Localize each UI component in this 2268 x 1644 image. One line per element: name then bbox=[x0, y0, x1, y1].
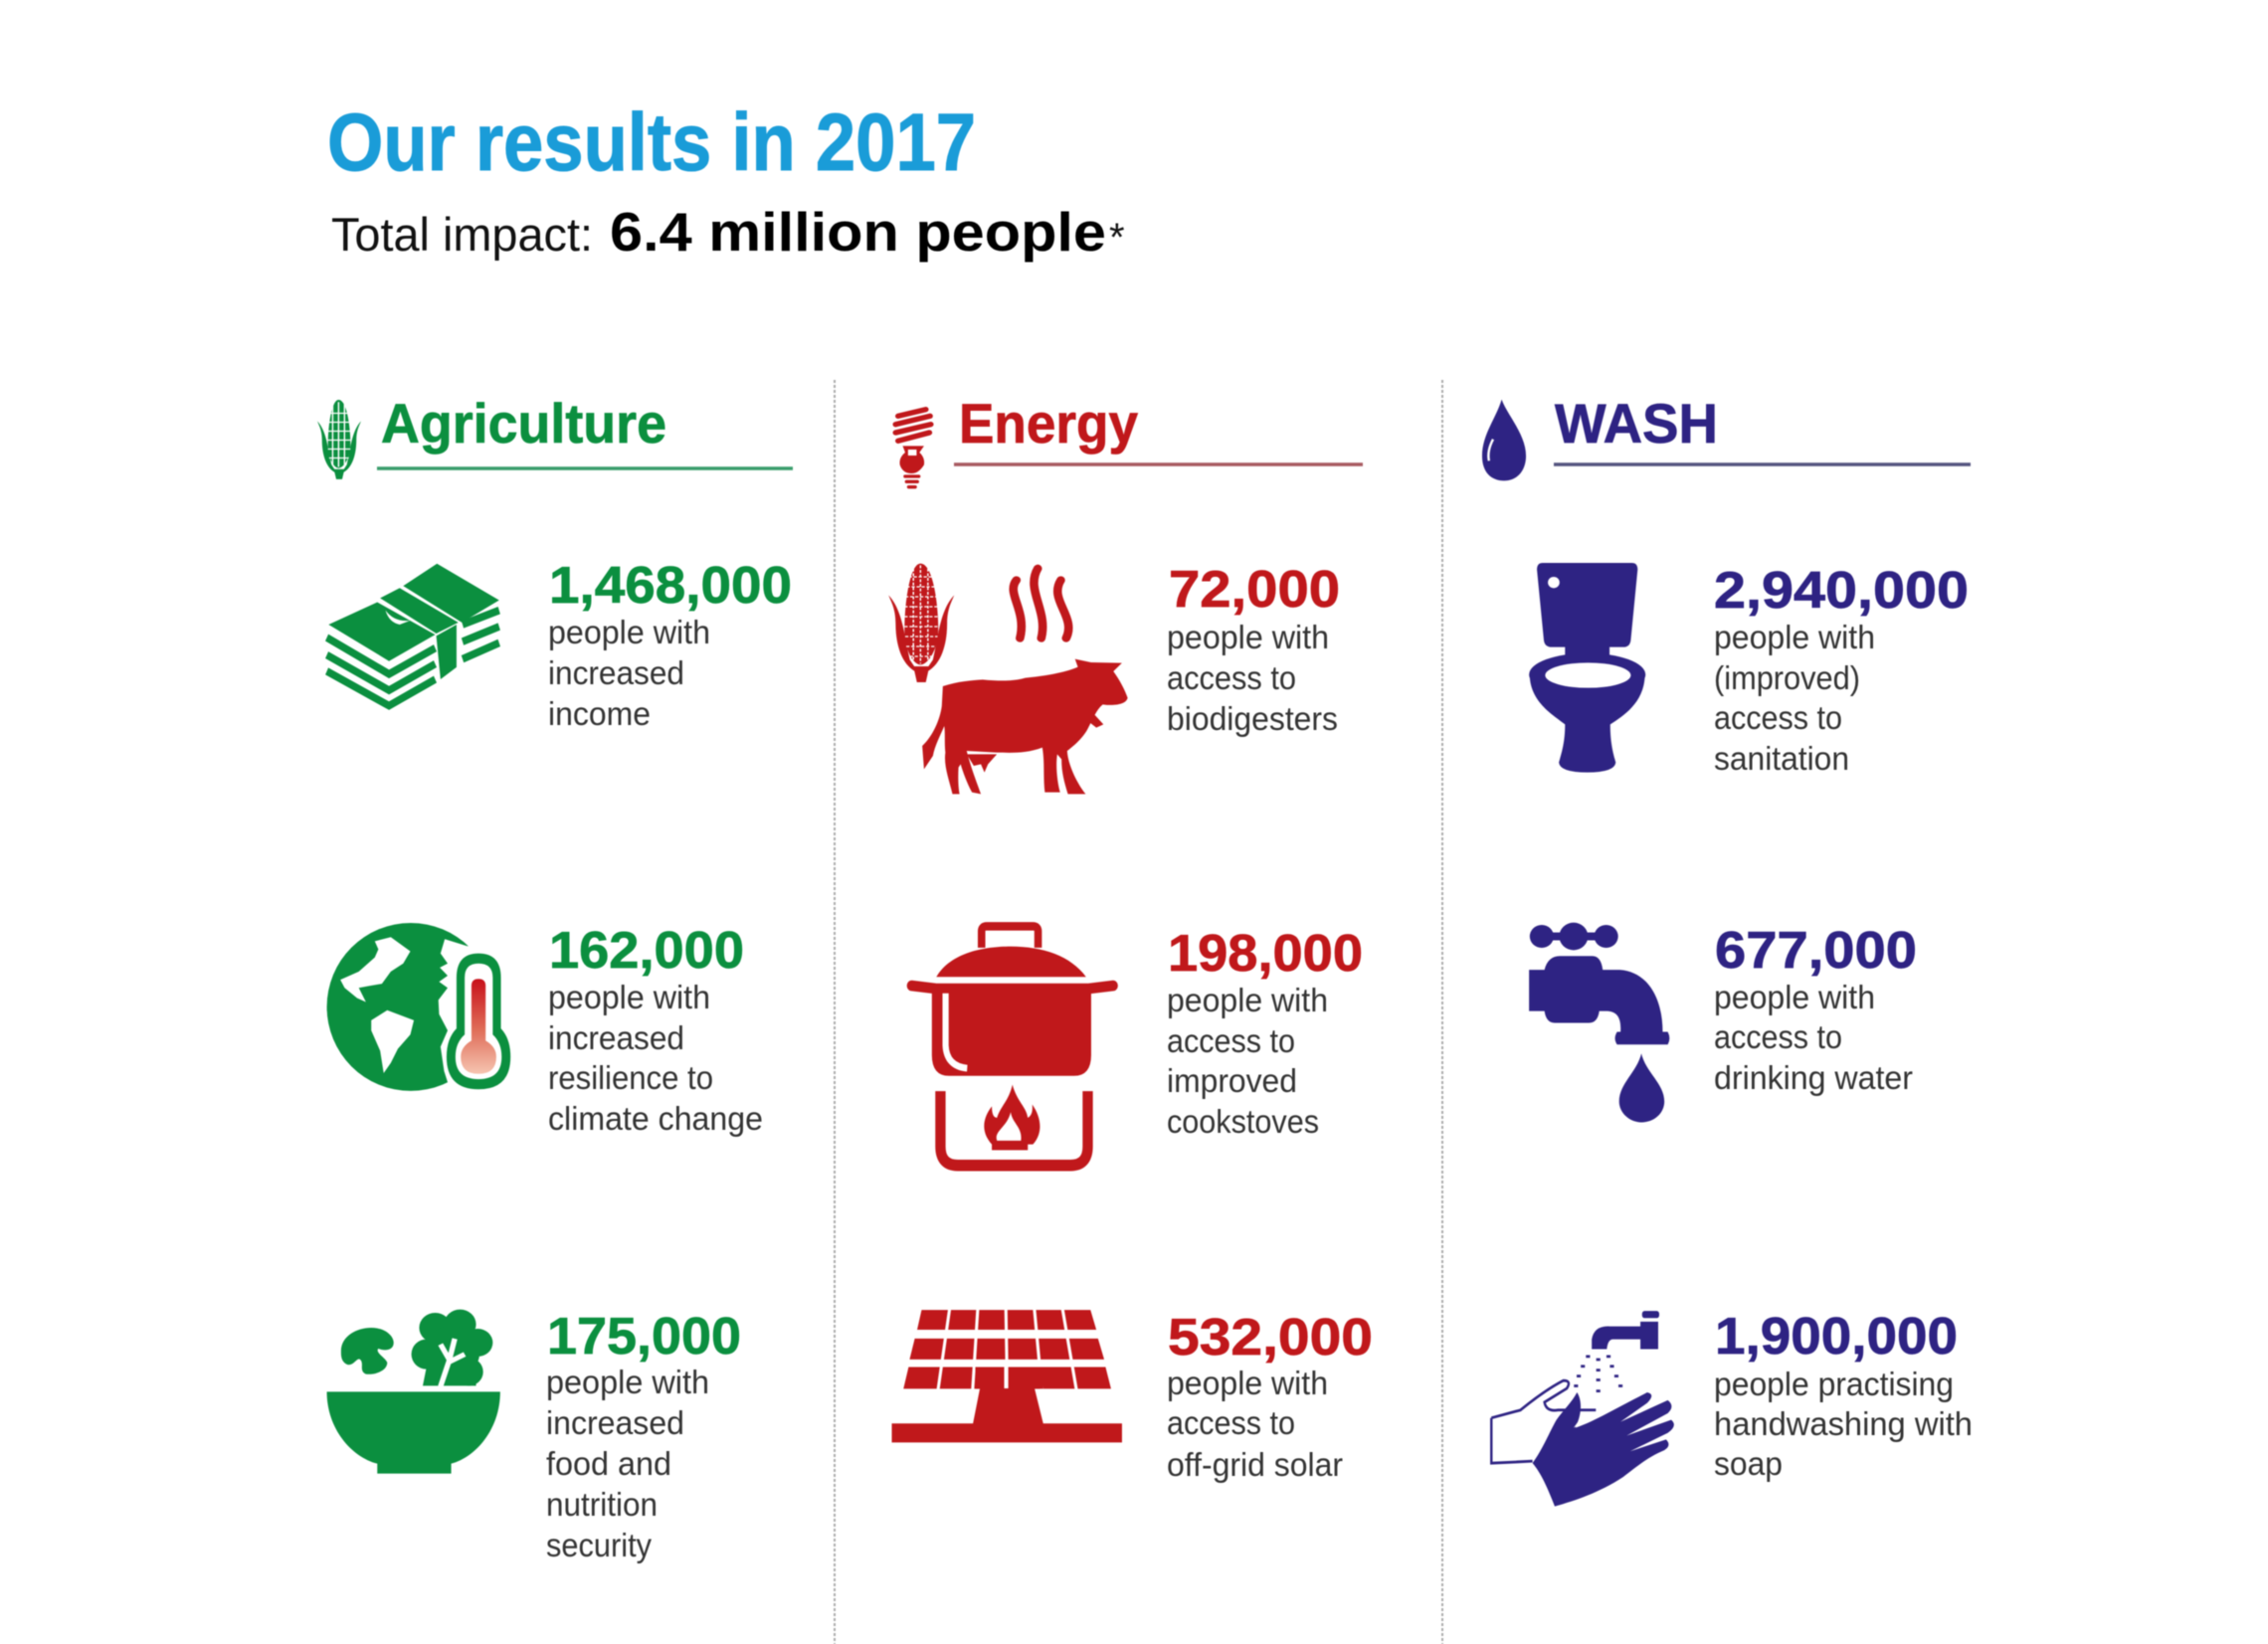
stat: 532,000: 532,000 bbox=[1168, 1309, 1373, 1367]
stat: 162,000: climate change bbox=[548, 1100, 763, 1137]
icon: hands under tap bbox=[1491, 1311, 1674, 1507]
stat: 198,000 bbox=[1167, 925, 1363, 1140]
icon: tap and drop bbox=[1529, 923, 1669, 1122]
stat: 1,468,000: increased bbox=[548, 654, 684, 691]
stat: 72,000: 72,000 bbox=[1169, 561, 1340, 619]
stat: 162,000: people with bbox=[548, 979, 710, 1015]
stat: 162,000 bbox=[548, 922, 763, 1137]
stat: 1,468,000 bbox=[548, 557, 792, 732]
heading: agriculture: Agriculture bbox=[381, 392, 666, 455]
stat: 198,000: access to bbox=[1167, 1022, 1295, 1059]
stat: 2,940,000: access to bbox=[1714, 699, 1842, 736]
icon: solar panel bbox=[892, 1308, 1122, 1442]
stat row: solar bbox=[892, 1308, 1373, 1483]
stat: 532,000 bbox=[1167, 1309, 1373, 1483]
stat: 175,000: food and bbox=[546, 1445, 671, 1482]
stat: 175,000 bbox=[546, 1308, 741, 1563]
stat: 175,000: security bbox=[546, 1527, 652, 1563]
stat: 72,000: people with bbox=[1167, 619, 1329, 655]
icon: light bulb bbox=[895, 410, 931, 487]
stat: 1,468,000: income bbox=[548, 695, 651, 732]
heading: wash: WASH bbox=[1555, 392, 1718, 455]
stat: 677,000: 677,000 bbox=[1715, 922, 1917, 980]
stat: 2,940,000: (improved) bbox=[1714, 659, 1860, 696]
stat: 198,000: cookstoves bbox=[1167, 1103, 1319, 1140]
icon: globe and thermometer bbox=[327, 923, 518, 1093]
stat: 2,940,000: people with bbox=[1714, 619, 1875, 655]
stat: 2,940,000: sanitation bbox=[1714, 740, 1849, 777]
stat: 2,940,000 bbox=[1714, 562, 1969, 777]
panel: wash bbox=[1482, 392, 1973, 1507]
subtitle: total impact: Total impact: bbox=[331, 208, 593, 261]
stat: 677,000 bbox=[1714, 922, 1917, 1096]
stat: 175,000: 175,000 bbox=[547, 1308, 741, 1366]
stat row: handwashing bbox=[1491, 1308, 1973, 1507]
stat: 72,000: biodigesters bbox=[1167, 700, 1338, 737]
icon: toilet bbox=[1529, 563, 1645, 773]
stat: 1,900,000: 1,900,000 bbox=[1715, 1308, 1958, 1366]
subtitle: total impact bbox=[331, 201, 1125, 263]
heading: energy: Energy bbox=[959, 392, 1138, 455]
subtitle: total impact: * bbox=[1109, 216, 1125, 260]
title: Our results in 2017 bbox=[327, 97, 976, 188]
stat: 532,000: off-grid solar bbox=[1167, 1446, 1343, 1483]
stat: 1,900,000: people practising bbox=[1714, 1366, 1954, 1402]
icon: cooking pot on stove bbox=[912, 926, 1113, 1166]
panel: agriculture bbox=[317, 392, 793, 1563]
stat: 162,000: resilience to bbox=[548, 1059, 713, 1096]
stat: 1,900,000: soap bbox=[1714, 1445, 1783, 1482]
stat row: climate resilience bbox=[327, 922, 763, 1137]
stat: 2,940,000: 2,940,000 bbox=[1714, 562, 1969, 620]
icon: money stack bbox=[327, 564, 499, 706]
icon: corn bbox=[317, 400, 361, 479]
stat: 175,000: increased bbox=[546, 1404, 684, 1441]
stat row: sanitation bbox=[1529, 562, 1969, 777]
stat: 677,000: access to bbox=[1714, 1018, 1842, 1055]
stat: 677,000: drinking water bbox=[1714, 1059, 1913, 1096]
stat: 198,000: 198,000 bbox=[1168, 925, 1363, 983]
stat: 1,900,000 bbox=[1714, 1308, 1973, 1482]
stat: 162,000: increased bbox=[548, 1019, 684, 1056]
subtitle: total impact: 6.4 million people bbox=[610, 201, 1106, 263]
stat row: food and nutrition bbox=[327, 1308, 741, 1563]
stat: 72,000: access to bbox=[1167, 659, 1296, 696]
stat: 677,000: people with bbox=[1714, 979, 1875, 1015]
stat row: increased income bbox=[327, 557, 792, 732]
stat: 532,000: access to bbox=[1167, 1404, 1295, 1441]
stat: 72,000 bbox=[1167, 561, 1340, 737]
stat row: drinking water bbox=[1529, 922, 1917, 1122]
icon: corn, steam and cow bbox=[888, 564, 1128, 794]
stat: 1,468,000: people with bbox=[548, 614, 710, 650]
stat: 532,000: people with bbox=[1167, 1365, 1328, 1401]
stat: 1,900,000: handwashing with bbox=[1714, 1405, 1973, 1442]
icon: salad bowl bbox=[327, 1310, 500, 1474]
stat: 162,000: 162,000 bbox=[549, 922, 744, 980]
stat: 175,000: people with bbox=[546, 1364, 709, 1400]
panel: energy bbox=[888, 392, 1373, 1483]
stat row: cookstoves bbox=[912, 925, 1363, 1166]
stat: 1,468,000: 1,468,000 bbox=[549, 557, 792, 615]
stat: 198,000: improved bbox=[1167, 1062, 1297, 1099]
stat row: biodigesters bbox=[888, 561, 1340, 794]
icon: water drop bbox=[1482, 400, 1526, 480]
stat: 198,000: people with bbox=[1167, 982, 1328, 1018]
stat: 175,000: nutrition bbox=[546, 1486, 658, 1523]
